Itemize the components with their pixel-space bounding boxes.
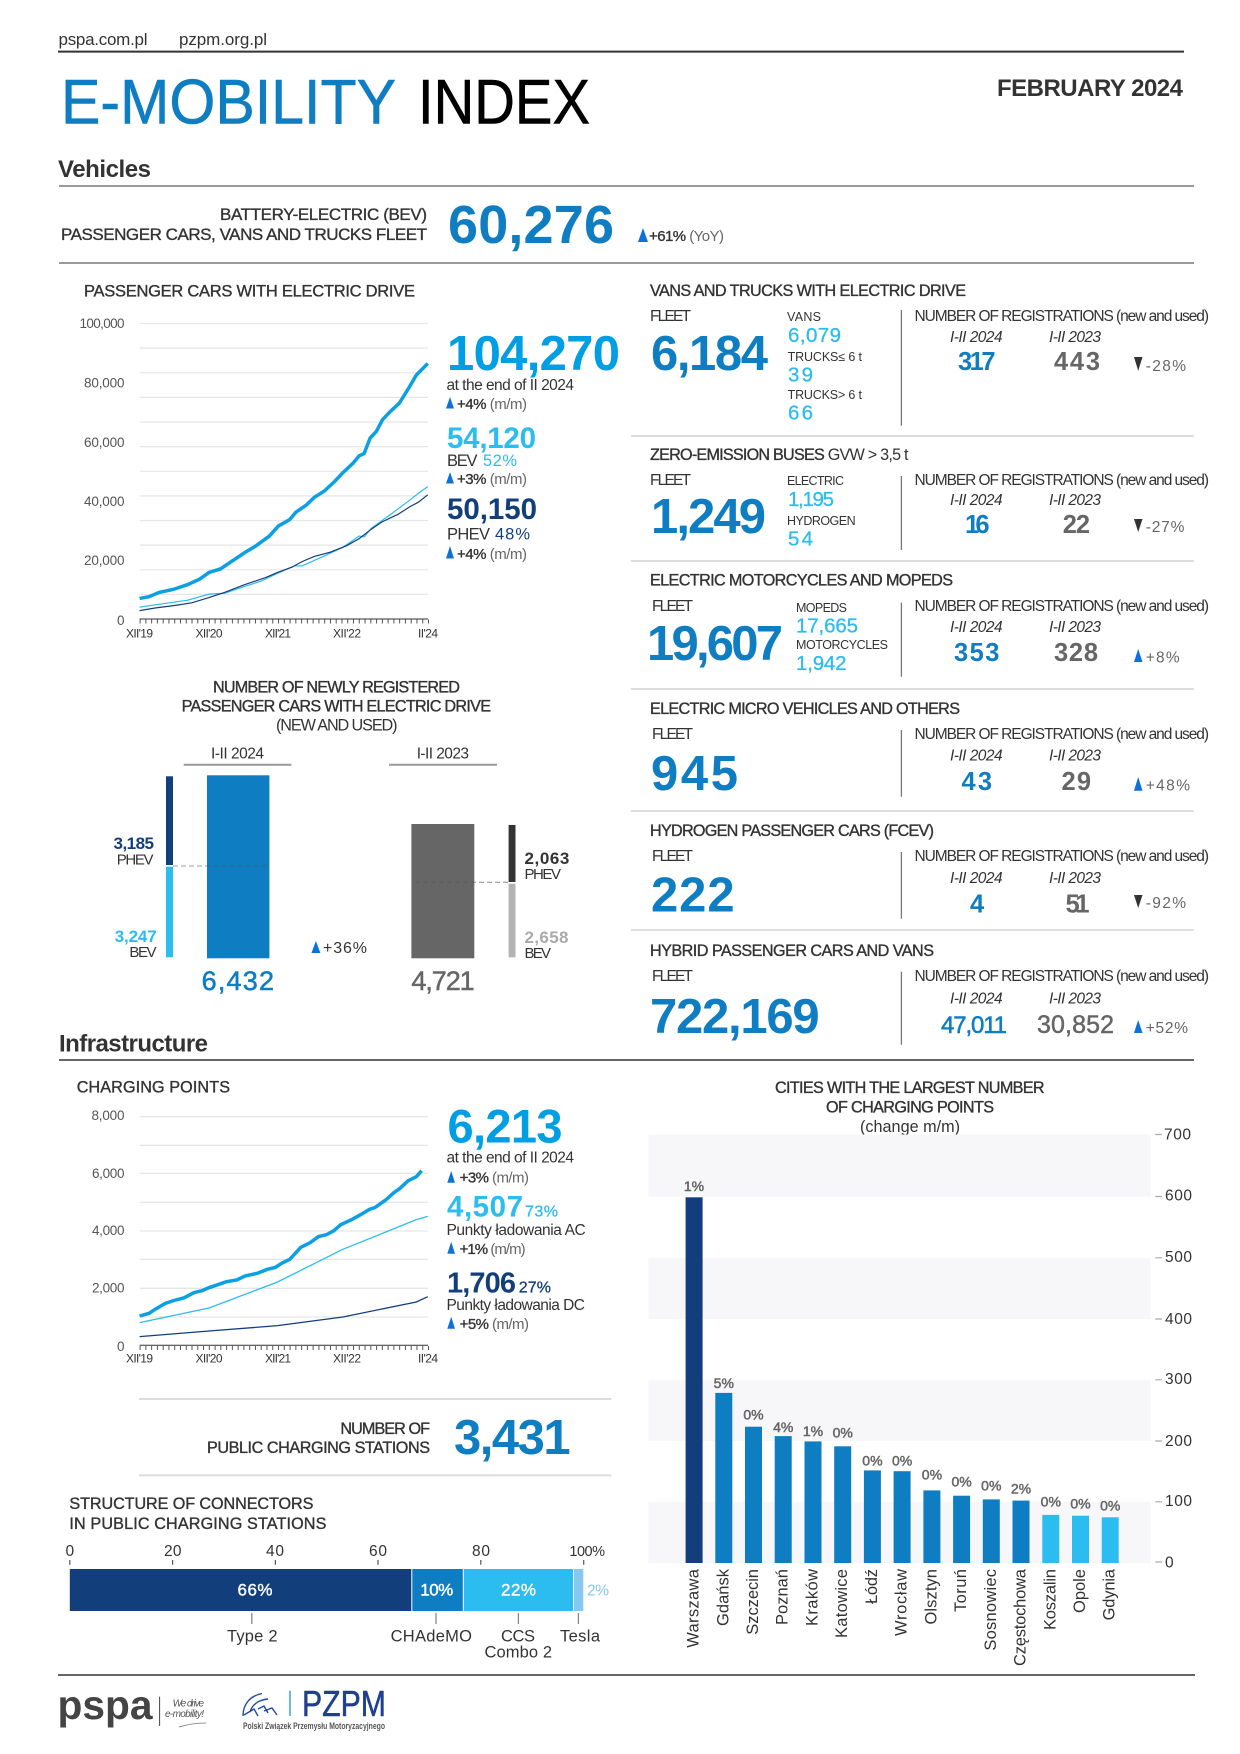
panel: vans and trucks: 66 [788, 402, 813, 425]
axis: count: 700 [1164, 1126, 1191, 1144]
panel: vans and trucks: 317 [958, 348, 996, 376]
stats: charging points: at the end of II 2024 [446, 1150, 574, 1167]
BEV fleet headline: +61% (YoY) [649, 228, 724, 245]
panel: electric micro vehicles: NUMBER OF REGISTRATIONS (new and used) [914, 726, 1209, 743]
panel: passenger cars with electric drive: 20,000 [84, 553, 124, 568]
panel: electric micro vehicles: 43 [962, 768, 992, 796]
legend labels: connector types: CCS [501, 1628, 535, 1646]
bar: 2024 [114, 775, 274, 996]
panel: electric motorcycles and mopeds: MOPEDS [796, 601, 847, 615]
axis: percent [66, 1543, 605, 1565]
panel: electric motorcycles and mopeds: 353 [954, 639, 999, 667]
value labels: percent change: 5% [714, 1375, 734, 1391]
bar: 2024: 6,432 [202, 966, 274, 996]
panel: electric motorcycles and mopeds [647, 572, 1209, 677]
stats: passenger cars: BEV [447, 452, 478, 470]
panel: vans and trucks: FLEET [650, 308, 692, 325]
panel: hydrogen passenger cars: FLEET [652, 848, 694, 865]
panel: hybrid passenger cars and vans: +52% [1146, 1020, 1188, 1037]
value labels: percent change: 0% [1100, 1498, 1120, 1514]
city labels [684, 1568, 1119, 1666]
panel: passenger cars with electric drive: 100,000 [80, 316, 124, 331]
city labels: Szczecin [744, 1569, 762, 1635]
callout: public charging stations: NUMBER OF [340, 1420, 430, 1438]
panel: passenger cars with electric drive: 0 [117, 613, 125, 628]
panel: hybrid passenger cars and vans: 30,852 [1037, 1011, 1114, 1039]
city labels: Opole [1071, 1569, 1089, 1613]
panel: hydrogen passenger cars: I-II 2024 [950, 870, 1003, 887]
panel: vans and trucks: I-II 2024 [950, 329, 1003, 346]
panel: vans and trucks: I-II 2023 [1049, 329, 1101, 346]
logo: PZPM [243, 1683, 386, 1732]
panel: charging points: XII'20 [196, 1352, 223, 1366]
city labels: Sosnowiec [982, 1569, 1000, 1651]
bar: 2024: 3,247 [115, 927, 157, 946]
panel: passenger cars with electric drive: XII'19 [126, 626, 153, 640]
callout: public charging stations [207, 1411, 571, 1465]
axis: count [1164, 1126, 1192, 1572]
panel: electric micro vehicles: +48% [1146, 778, 1190, 794]
value labels: percent change: 0% [922, 1467, 942, 1483]
legend labels: connector types: Tesla [560, 1628, 601, 1646]
value labels: percent change: 0% [833, 1425, 853, 1441]
heading: vans and trucks: VANS AND TRUCKS WITH ELECTRIC DRIVE [650, 282, 966, 300]
panel: passenger cars with electric drive: XII'21 [265, 626, 291, 640]
stats: charging points: 73% [525, 1204, 558, 1221]
heading: micro vehicles: ELECTRIC MICRO VEHICLES AND OTHERS [650, 700, 960, 718]
panel: electric micro vehicles: I-II 2024 [950, 748, 1003, 764]
panel: hybrid passenger cars and vans: I-II 2024 [950, 990, 1003, 1007]
panel: hydrogen passenger cars: 222 [651, 869, 735, 923]
stacked bar: connectors: 22% [501, 1581, 536, 1600]
panel: electric micro vehicles: 29 [1062, 768, 1091, 796]
header links: pspa.com.pl [58, 30, 148, 49]
value labels: percent change: 0% [951, 1474, 972, 1490]
stats: charging points: +5% (m/m) [460, 1316, 529, 1333]
panel: hydrogen passenger cars: NUMBER OF REGISTRATIONS (new and used) [914, 848, 1209, 865]
bar: 2023: 2,658 [524, 928, 568, 947]
panel: vans and trucks: 443 [1054, 348, 1100, 376]
panel: charging points: 2,000 [92, 1281, 124, 1296]
panel: hybrid passenger cars and vans: NUMBER OF REGISTRATIONS (new and used) [914, 968, 1209, 985]
panel: hydrogen passenger cars: 4 [970, 891, 985, 919]
panel: passenger cars with electric drive: XII'20 [196, 626, 223, 640]
city labels: Koszalin [1041, 1569, 1059, 1630]
stats: passenger cars: 54,120 [447, 422, 536, 455]
panel: electric motorcycles and mopeds: +8% [1146, 650, 1180, 666]
panel: passenger cars with electric drive: 60,000 [84, 435, 124, 450]
panel: charging points: XII'19 [126, 1352, 153, 1366]
panel: zero-emission buses: I-II 2024 [950, 492, 1003, 509]
panel: vans and trucks: -28% [1146, 358, 1186, 375]
panel: zero-emission buses: ELECTRIC [787, 474, 844, 488]
panel: vans and trucks: TRUCKS≤ 6 t [788, 350, 863, 364]
heading: cities: OF CHARGING POINTS [826, 1098, 994, 1116]
heading: cities: (change m/m) [860, 1118, 960, 1136]
panel: electric motorcycles and mopeds: 17,665 [796, 615, 858, 638]
panel: electric motorcycles and mopeds: I-II 2023 [1049, 619, 1101, 636]
stats: charging points: 6,213 [448, 1100, 562, 1153]
axis: percent: 20 [164, 1543, 182, 1560]
stacked bar: connectors: 10% [420, 1581, 453, 1600]
panel: vans and trucks: VANS [787, 310, 821, 324]
stats: passenger cars: 104,270 [447, 327, 620, 381]
panel: electric motorcycles and mopeds: I-II 2024 [950, 619, 1003, 636]
title [61, 68, 590, 138]
panel: charging points: XII'21 [265, 1352, 291, 1366]
panel: newly registered passenger cars [114, 679, 569, 996]
panel: charging points: XII'22 [333, 1352, 361, 1366]
city labels: Poznań [774, 1569, 792, 1625]
panel: zero-emission buses: 1,249 [651, 490, 766, 544]
panel: zero-emission buses: NUMBER OF REGISTRATIONS (new and used) [914, 472, 1209, 489]
panel: hybrid passenger cars and vans: 47,011 [941, 1012, 1007, 1039]
stats: charging points [446, 1100, 586, 1333]
panel: zero-emission buses: 16 [965, 511, 990, 539]
city labels: Częstochowa [1012, 1568, 1030, 1666]
panel: charging points: 4,000 [92, 1223, 124, 1238]
city labels: Olsztyn [922, 1569, 940, 1624]
value labels: percent change: 2% [1011, 1480, 1031, 1496]
panel: zero-emission buses: HYDROGEN [787, 514, 856, 528]
panel: passenger cars with electric drive: 40,000 [84, 494, 124, 509]
axis: count: 600 [1165, 1188, 1192, 1204]
logo: pspa: We drive [173, 1699, 204, 1710]
panel: electric micro vehicles: I-II 2023 [1049, 748, 1101, 764]
stacked bar: connectors: 2% [587, 1583, 609, 1600]
axis: count: 300 [1165, 1371, 1192, 1388]
stats: charging points: 1,706 [447, 1267, 516, 1299]
stats: charging points: Punkty ładowania AC [446, 1222, 586, 1239]
city labels: Gdańsk [714, 1568, 732, 1626]
panel: hydrogen passenger cars: I-II 2023 [1049, 870, 1101, 887]
callout: public charging stations: PUBLIC CHARGING STATIONS [207, 1439, 430, 1457]
bar: 2023: PHEV [524, 866, 561, 883]
panel: zero-emission buses: 1,195 [788, 488, 834, 511]
callout: public charging stations: 3,431 [454, 1411, 571, 1465]
panel: hybrid passenger cars and vans: FLEET [652, 968, 694, 985]
stacked bar: connectors [70, 1569, 609, 1611]
value labels: percent change [684, 1178, 1120, 1514]
value labels: percent change: 0% [862, 1453, 883, 1469]
panel: charging points: 0 [117, 1339, 125, 1354]
stats: charging points: 4,507 [447, 1191, 523, 1224]
heading: passenger cars: PASSENGER CARS WITH ELECTRIC DRIVE [84, 283, 415, 301]
axis: count: 500 [1165, 1249, 1192, 1266]
axis: percent: 100% [569, 1544, 605, 1560]
stats: charging points: +1% (m/m) [460, 1241, 526, 1258]
panel: electric micro vehicles [650, 700, 1209, 801]
panel: passenger cars with electric drive [80, 283, 620, 640]
heading: newly registered: NUMBER OF NEWLY REGISTERED [213, 679, 460, 697]
panel: newly registered passenger cars: I-II 2023 [417, 746, 469, 763]
header links [58, 30, 267, 49]
panel: charging points: 8,000 [92, 1108, 124, 1123]
panel: hybrid passenger cars and vans [650, 942, 1209, 1045]
value labels: percent change: 0% [892, 1453, 912, 1469]
panel: electric motorcycles and mopeds: 1,942 [796, 652, 846, 675]
value labels: percent change: 0% [1070, 1496, 1091, 1512]
city labels: Gdynia [1101, 1568, 1119, 1620]
panel: zero-emission buses: -27% [1146, 519, 1185, 536]
stats: passenger cars: +4% (m/m) [457, 546, 527, 563]
change: +36%: +36% [323, 940, 367, 957]
BEV fleet headline: 60,276 [448, 195, 614, 255]
panel: vans and trucks: 6,079 [788, 324, 841, 347]
stats: charging points: 27% [519, 1279, 551, 1296]
stats: charging points: Punkty ładowania DC [446, 1297, 585, 1314]
axis: count: 200 [1165, 1433, 1192, 1450]
panel: cities with most charging points [648, 1079, 1192, 1666]
panel: electric motorcycles and mopeds: NUMBER OF REGISTRATIONS (new and used) [914, 598, 1209, 615]
panel: charging points [77, 1079, 586, 1366]
BEV fleet headline [61, 195, 724, 255]
heading: cities: CITIES WITH THE LARGEST NUMBER [775, 1079, 1045, 1097]
panel: hybrid passenger cars and vans: 722,169 [650, 990, 820, 1044]
logo: pspa: e-mobility! [165, 1709, 204, 1720]
panel: hybrid passenger cars and vans: I-II 2023 [1049, 990, 1101, 1007]
legend labels: connector types [227, 1613, 601, 1662]
city labels: Kraków [804, 1569, 822, 1626]
title: INDEX [418, 68, 590, 138]
panel: zero-emission buses: 22 [1063, 511, 1090, 539]
panel: charging points: II'24 [418, 1352, 438, 1366]
legend labels: connector types: CHAdeMO [391, 1628, 472, 1646]
heading: buses: ZERO-EMISSION BUSES GVW > 3,5 t [650, 446, 909, 464]
axis: count: 100 [1165, 1493, 1192, 1510]
panel: electric motorcycles and mopeds: 19,607 [647, 617, 783, 671]
legend labels: connector types: Type 2 [227, 1628, 278, 1646]
logo: PZPM: Polski Związek Przemysłu Motoryzacyjnego [243, 1721, 385, 1732]
logo: PZPM: PZPM [302, 1683, 386, 1724]
stats: passenger cars [446, 327, 620, 563]
bar: 2024: 3,185 [114, 834, 154, 853]
bar: 2024: BEV [129, 944, 156, 961]
panel: zero-emission buses: 54 [788, 528, 813, 551]
bar: 2024: PHEV [117, 852, 154, 869]
axis: percent: 80 [472, 1543, 490, 1560]
heading: hydrogen: HYDROGEN PASSENGER CARS (FCEV) [650, 822, 934, 840]
panel: vans and trucks: NUMBER OF REGISTRATIONS (new and used) [914, 308, 1209, 325]
bar: 2023: 2,063 [524, 849, 569, 868]
stats: passenger cars: PHEV [447, 526, 490, 544]
value labels: percent change: 4% [773, 1419, 793, 1435]
value labels: percent change: 1% [803, 1423, 823, 1439]
heading: vehicles: Vehicles [58, 156, 151, 183]
legend labels: connector types: Combo 2 [484, 1644, 552, 1662]
panel: vans and trucks: TRUCKS> 6 t [788, 388, 863, 402]
heading: newly registered: (NEW AND USED) [276, 717, 398, 735]
heading: hybrid: HYBRID PASSENGER CARS AND VANS [650, 942, 934, 960]
value labels: percent change: 1% [684, 1178, 704, 1194]
axis: percent: 0 [66, 1543, 74, 1560]
city labels: Toruń [952, 1569, 970, 1612]
panel: electric motorcycles and mopeds: 328 [1054, 639, 1098, 667]
panel: passenger cars with electric drive: 80,000 [84, 376, 124, 390]
city labels: Wrocław [893, 1569, 911, 1636]
heading: infrastructure: Infrastructure [59, 1030, 208, 1058]
logo: pspa: pspa [58, 1682, 154, 1728]
panel: passenger cars with electric drive: II'24 [418, 626, 438, 640]
heading: connectors: STRUCTURE OF CONNECTORS [69, 1495, 314, 1513]
panel: newly registered passenger cars: I-II 2024 [211, 746, 264, 763]
panel: zero-emission buses: FLEET [650, 472, 692, 489]
BEV fleet headline: BATTERY-ELECTRIC (BEV) [220, 205, 427, 224]
panel: hydrogen passenger cars: -92% [1146, 895, 1186, 912]
heading: newly registered [182, 679, 491, 735]
panel: electric micro vehicles: 945 [651, 747, 738, 801]
stats: passenger cars: at the end of II 2024 [446, 377, 574, 394]
logo: pspa [58, 1682, 206, 1728]
panel: hydrogen passenger cars [650, 822, 1209, 923]
heading: connectors [69, 1495, 327, 1533]
city labels: Warszawa [684, 1568, 702, 1648]
axis: percent: 60 [369, 1543, 387, 1560]
stats: charging points: +3% (m/m) [460, 1170, 529, 1187]
panel: zero-emission buses: I-II 2023 [1049, 492, 1101, 509]
city labels: Łódź [863, 1569, 881, 1604]
heading: newly registered: PASSENGER CARS WITH ELECTRIC DRIVE [182, 698, 491, 716]
bar: 2023 [411, 824, 569, 996]
city labels: Katowice [833, 1569, 851, 1638]
line chart: charging points [140, 1171, 428, 1337]
heading: connectors: IN PUBLIC CHARGING STATIONS [69, 1515, 327, 1533]
stacked bar: connectors: 66% [238, 1581, 272, 1600]
panel: zero-emission buses [650, 446, 1209, 551]
panel: structure of connectors [66, 1495, 609, 1662]
axis: count: 0 [1165, 1554, 1174, 1572]
line chart: passenger cars fleet [140, 363, 428, 611]
heading: charging points: CHARGING POINTS [77, 1079, 230, 1097]
panel: hydrogen passenger cars: 51 [1066, 891, 1090, 919]
bar: 2023: BEV [524, 945, 551, 962]
panel: vans and trucks: 39 [788, 364, 813, 387]
header links: pzpm.org.pl [179, 30, 267, 49]
panel: charging points: 6,000 [92, 1166, 124, 1181]
axis: count: 400 [1165, 1311, 1192, 1328]
stats: passenger cars: +4% (m/m) [457, 396, 527, 413]
BEV fleet headline: PASSENGER CARS, VANS AND TRUCKS FLEET [61, 225, 427, 244]
panel: electric motorcycles and mopeds: MOTORCYCLES [796, 638, 888, 652]
stats: passenger cars: 50,150 [447, 493, 537, 526]
panel: electric micro vehicles: FLEET [652, 726, 694, 743]
bar chart: cities [686, 1197, 1119, 1563]
panel: electric motorcycles and mopeds: FLEET [652, 598, 694, 615]
stats: passenger cars: 52% [483, 452, 517, 470]
date: FEBRUARY 2024 [997, 75, 1184, 102]
stats: passenger cars: 48% [495, 526, 530, 544]
panel: vans and trucks: 6,184 [651, 327, 768, 381]
stats: passenger cars: +3% (m/m) [457, 471, 527, 488]
panel: passenger cars with electric drive: XII'22 [333, 626, 361, 640]
panel: vans and trucks [650, 282, 1209, 426]
value labels: percent change: 0% [1041, 1494, 1061, 1510]
axis: percent: 40 [266, 1543, 284, 1560]
heading: cities [775, 1079, 1045, 1136]
value labels: percent change: 0% [981, 1478, 1001, 1494]
title: E-MOBILITY [61, 68, 396, 138]
heading: motorcycles: ELECTRIC MOTORCYCLES AND MOPEDS [650, 572, 953, 590]
bar: 2023: 4,721 [411, 966, 475, 996]
value labels: percent change: 0% [743, 1407, 764, 1423]
